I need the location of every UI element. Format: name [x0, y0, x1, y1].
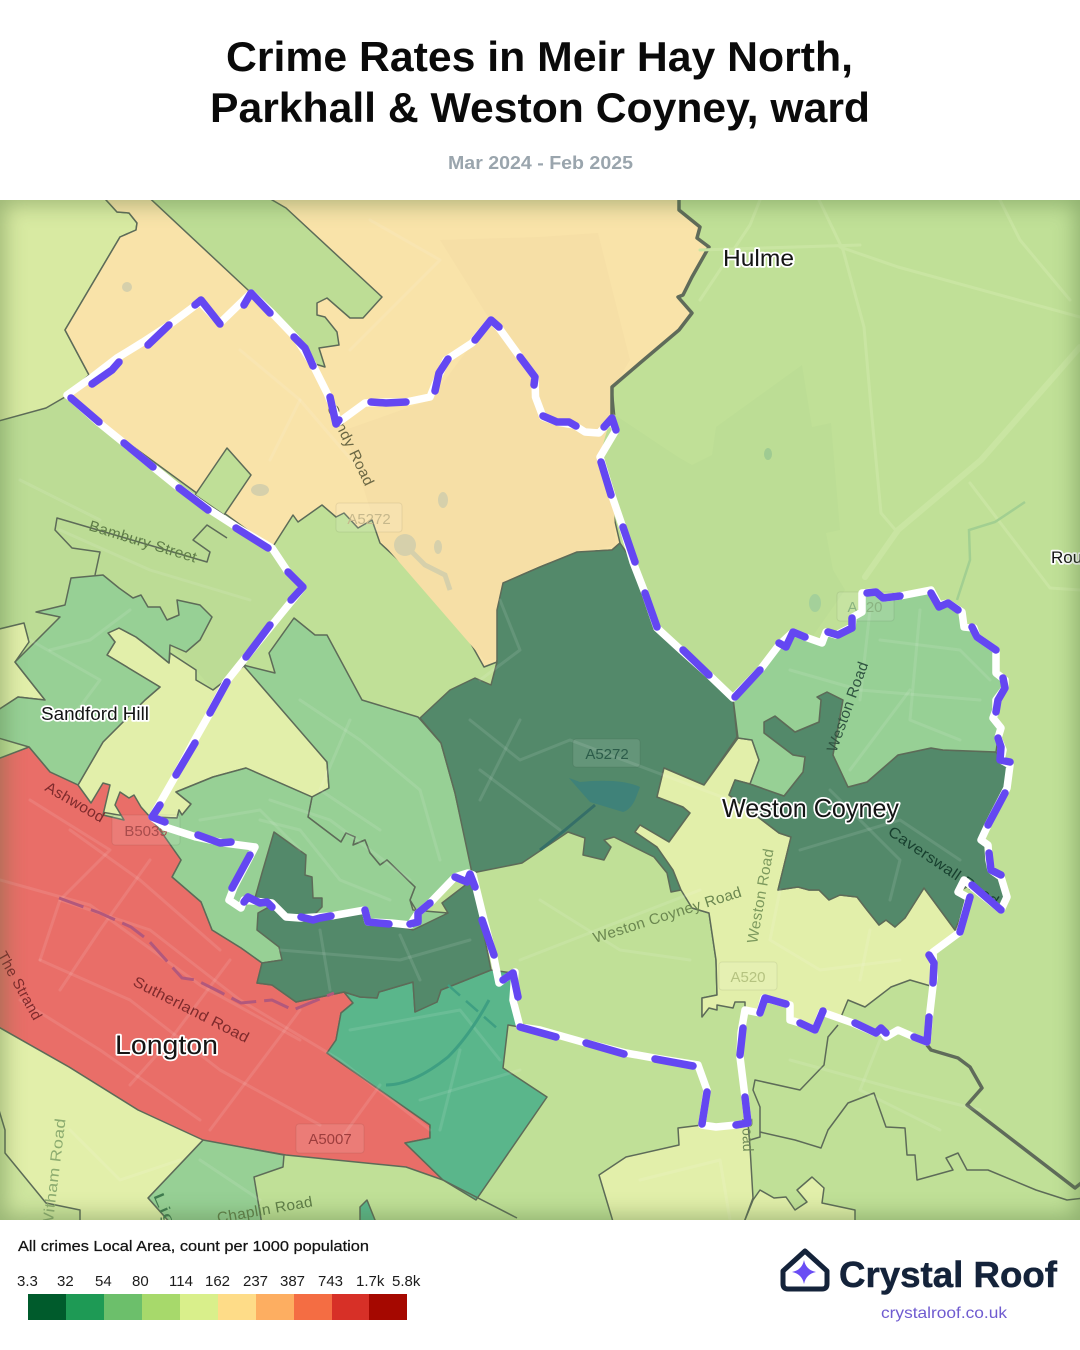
legend values: 32: [57, 1273, 74, 1290]
area: lower dark green: [257, 873, 491, 1012]
legend values: [17, 1273, 421, 1290]
road shields: A5272: [347, 511, 391, 528]
area: south-west pale: [0, 1025, 203, 1225]
title: [210, 33, 870, 131]
area: central dark green: [420, 543, 737, 892]
road labels: Chaplin Road: [216, 1193, 314, 1227]
legend values: 54: [95, 1273, 112, 1290]
logo wordmark: Crystal Roof: [839, 1254, 1058, 1295]
area: central yellow (162-237 band): [65, 190, 709, 667]
road shields: B5039: [124, 823, 168, 840]
road labels: Ashwood: [42, 779, 108, 826]
ward outline: purple dashes: [71, 293, 1010, 1125]
dashed stream: [448, 985, 499, 1030]
legend values: 1.7k: [356, 1273, 385, 1290]
canal in teal area: [386, 1000, 489, 1085]
road shields: A520: [730, 969, 766, 986]
subtitle: date range: Mar 2024 - Feb 2025: [448, 153, 633, 173]
district boundary east: [612, 190, 1080, 1188]
legend colour scale: [28, 1294, 407, 1320]
place labels: Hulme: [723, 245, 794, 271]
road shields: A520: [847, 599, 883, 616]
lake: Park Hall pond: [569, 778, 640, 812]
road labels: Weston Road: [824, 659, 872, 754]
place labels: Sandford Hill: [41, 704, 149, 724]
legend values: 743: [318, 1273, 343, 1290]
area: central mid green: [243, 618, 472, 913]
legend title: All crimes Local Area, count per 1000 population: [18, 1238, 369, 1255]
area: Longton red: [0, 747, 443, 1180]
road shields: A5007: [308, 1131, 352, 1148]
road labels: [0, 402, 1002, 1253]
area: dark green finger: [255, 832, 322, 917]
logo: Crystal Roof: [783, 1251, 1058, 1322]
area: left lime shade: [0, 397, 303, 690]
road labels: Sutherland Road: [130, 973, 252, 1047]
area: Weston Coyney dark green: [729, 692, 1010, 930]
area: north-west pale: [0, 190, 137, 422]
legend values: 237: [243, 1273, 268, 1290]
area: pale west sliver: [0, 623, 45, 712]
road labels: Witham Road: [39, 1117, 70, 1230]
area: Bambury Street outline: [55, 518, 227, 575]
legend values: 387: [280, 1273, 305, 1290]
legend values: 5.8k: [392, 1273, 421, 1290]
road shields: A5272: [585, 746, 629, 763]
place labels: [41, 245, 1080, 1060]
area: south-west mid green: [150, 768, 448, 963]
road shields: [112, 503, 894, 1153]
area: south-centre lime boundary: [692, 908, 717, 1017]
road labels: Road: [738, 1118, 756, 1152]
area: south-west mid green: [148, 1140, 284, 1225]
area: Sandford Hill pale: [78, 628, 329, 818]
legend values: 80: [132, 1273, 149, 1290]
road labels: Light: [149, 1190, 189, 1253]
ward outline: white line: [67, 293, 1010, 1127]
road labels: Sandy Road: [323, 402, 377, 489]
roads: [0, 200, 1080, 1220]
logo url: crystalroof.co.uk: [881, 1305, 1008, 1322]
area: far south-west lime: [0, 1111, 81, 1220]
title: Crime Rates in Meir Hay North,: [226, 33, 853, 80]
area: small green rectangle: [195, 448, 251, 515]
road labels: Weston Road: [744, 847, 778, 945]
legend values: 162: [205, 1273, 230, 1290]
area: Sandford mid green: [0, 575, 212, 785]
road labels: Bambury Street: [87, 518, 199, 567]
place labels: Longton: [115, 1030, 218, 1060]
road labels: Weston Coyney Road: [591, 884, 744, 947]
area: south-east boundaries: [750, 1025, 1080, 1200]
area: eastern forest shade: [603, 414, 616, 490]
area: small teal bump: [359, 1199, 376, 1220]
area: bottom boundary: [443, 1180, 517, 1218]
stream from pond: [540, 805, 595, 850]
railway through Longton: [59, 898, 334, 1010]
title: Parkhall & Weston Coyney, ward: [210, 84, 870, 131]
choropleth map: [0, 190, 1080, 1253]
legend values: 3.3: [17, 1273, 38, 1290]
area: south teal: [327, 970, 547, 1200]
ward boundary: [67, 293, 1010, 1127]
area: south-east pale block: [743, 1177, 855, 1225]
lakes in yellow area: [122, 282, 450, 590]
place labels: Weston Coyney: [722, 793, 899, 823]
area: north-east mid green: [733, 590, 1005, 796]
area: Weston pale yellow: [635, 738, 960, 1030]
legend: [17, 1238, 421, 1320]
area: north green strip: [141, 190, 382, 367]
area: yellow darker woodland: [388, 498, 615, 660]
area: south pale block: [599, 1123, 753, 1225]
icon: house with star: [783, 1251, 827, 1289]
road labels: Caverswall Road: [885, 823, 1002, 910]
legend values: 114: [169, 1273, 193, 1290]
